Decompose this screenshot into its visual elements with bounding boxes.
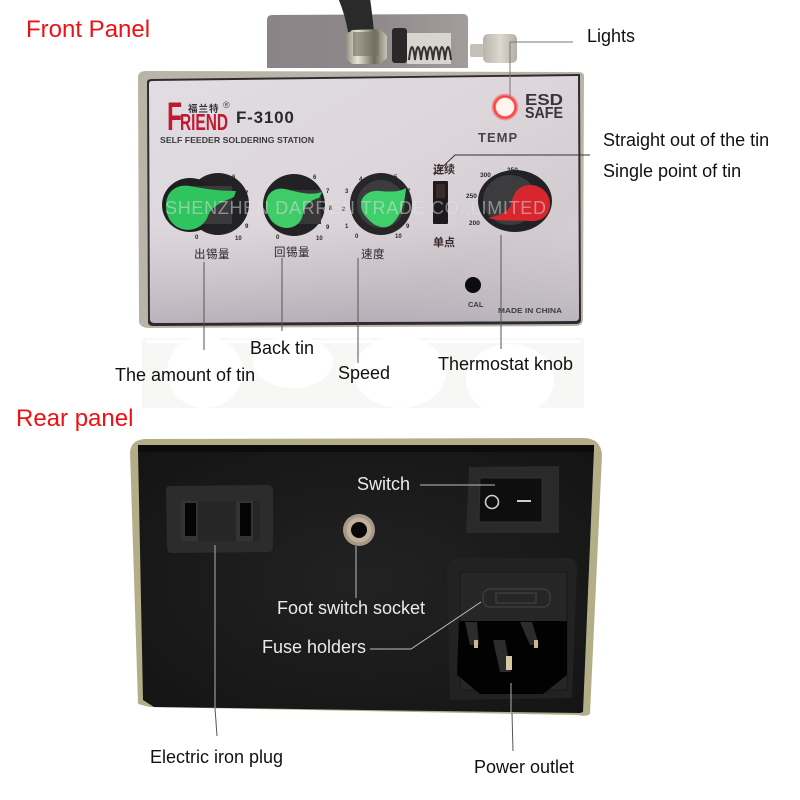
printed face — [149, 76, 579, 323]
thumb screw — [470, 34, 517, 63]
knob 3: speed: 1 — [345, 224, 349, 230]
electric iron socket — [166, 485, 273, 553]
ESD SAFE logo: SAFE — [525, 105, 563, 122]
knob 2: back tin: 8 — [329, 206, 333, 212]
knob 1: tin amount: 10 — [235, 236, 242, 242]
knob 1: tin amount: 出锡量 — [194, 247, 230, 261]
rear mounting plate — [267, 14, 468, 68]
knob 3: speed: 4 — [359, 177, 363, 183]
logo: Friend: RIEND — [180, 109, 228, 135]
labels: front panel: The amount of tin — [115, 365, 255, 385]
callout lines: rear panel — [356, 485, 495, 649]
inlet opening — [457, 621, 567, 694]
callout lines: rear panel bottom — [215, 545, 513, 751]
labels: rear panel bottom: Power outlet — [474, 757, 574, 777]
mode switch: 连续 — [433, 162, 455, 176]
thermostat knob: 200 — [469, 220, 480, 227]
labels: front panel: Back tin — [250, 338, 314, 358]
made in china: MADE IN CHINA — [498, 306, 563, 315]
fuse holder — [483, 589, 550, 607]
labels: front panel: Straight out of the tin — [603, 130, 769, 150]
labels: front panel: Thermostat knob — [438, 354, 573, 374]
knob 2: back tin — [263, 174, 333, 259]
knob 3: speed: 2 — [342, 207, 346, 213]
CAL port — [465, 277, 484, 309]
knob 3: speed: 0 — [355, 234, 359, 240]
panel: front panel photo — [138, 0, 584, 328]
knob 3: speed: 3 — [345, 189, 349, 195]
TEMP label: TEMP — [478, 130, 518, 145]
callout lines: front panel — [204, 42, 590, 363]
iron cable and connector — [338, 0, 451, 64]
labels: rear panel: Switch — [357, 474, 410, 494]
knob 1: tin amount: 6 — [232, 175, 236, 181]
knob 3: speed: 8 — [408, 206, 412, 212]
thermostat knob — [466, 167, 552, 232]
panel: rear panel photo — [130, 438, 602, 716]
heading: Front Panel: Front Panel — [26, 16, 150, 43]
power switch — [466, 466, 559, 533]
knob 3: speed: 10 — [395, 234, 402, 240]
mode switch: 单点 — [433, 235, 455, 249]
case shell — [138, 71, 584, 328]
power inlet with fuse holder — [447, 558, 577, 700]
labels: rear panel bottom: Electric iron plug — [150, 747, 283, 767]
knob 2: back tin: 9 — [326, 225, 330, 231]
logo: Friend: ® — [223, 100, 230, 110]
ESD SAFE logo — [525, 92, 563, 122]
inlet pins — [465, 622, 479, 645]
olive shell — [130, 438, 602, 716]
knob 2: back tin: 7 — [326, 189, 330, 195]
heading: Rear panel: Rear panel — [16, 405, 133, 432]
logo: Friend: F — [167, 95, 182, 139]
labels: front panel: Lights — [587, 26, 635, 46]
CAL port: CAL — [468, 300, 484, 309]
watermark: SHENZHEN DARREN TRADE CO.,LIMITED — [165, 198, 546, 218]
knob 3: speed — [342, 173, 412, 261]
thermostat knob: 250 — [466, 193, 477, 200]
knob 3: speed: 5 — [394, 175, 398, 181]
knob 1: tin amount: 0 — [195, 235, 199, 241]
mode switch — [433, 162, 455, 249]
labels: front panel: Speed — [338, 363, 390, 383]
knob 1: tin amount: 7 — [245, 191, 249, 197]
black back plate — [138, 449, 594, 713]
labels: front panel — [115, 26, 769, 385]
labels: rear panel: Fuse holders — [262, 637, 366, 657]
thermostat knob: 300 — [480, 172, 491, 179]
knob 1: tin amount — [162, 173, 249, 261]
knob 2: back tin: 0 — [276, 235, 280, 241]
ESD SAFE logo: ESD — [525, 92, 563, 109]
model number: F-3100 — [236, 108, 295, 127]
indicator light — [491, 93, 519, 121]
knob 3: speed: 7 — [407, 189, 411, 195]
labels: front panel: Single point of tin — [603, 161, 741, 181]
panel reflection under the front panel — [142, 336, 584, 416]
subtitle: SELF FEEDER SOLDERING STATION — [160, 135, 314, 145]
thermostat knob: 350 — [507, 167, 518, 174]
labels: rear panel — [262, 474, 425, 657]
knob 1: tin amount: 9 — [245, 224, 249, 230]
knob 2: back tin: 回锡量 — [274, 245, 310, 259]
foot switch socket — [343, 514, 375, 546]
labels: rear panel bottom — [150, 747, 574, 777]
knob 3: speed: 速度 — [361, 247, 385, 261]
logo: Friend — [167, 95, 230, 139]
knob 2: back tin: 10 — [316, 236, 323, 242]
logo: Friend: 福兰特 — [188, 103, 220, 115]
labels: rear panel: Foot switch socket — [277, 598, 425, 618]
knob 3: speed: 9 — [406, 224, 410, 230]
knob 2: back tin: 6 — [313, 175, 317, 181]
